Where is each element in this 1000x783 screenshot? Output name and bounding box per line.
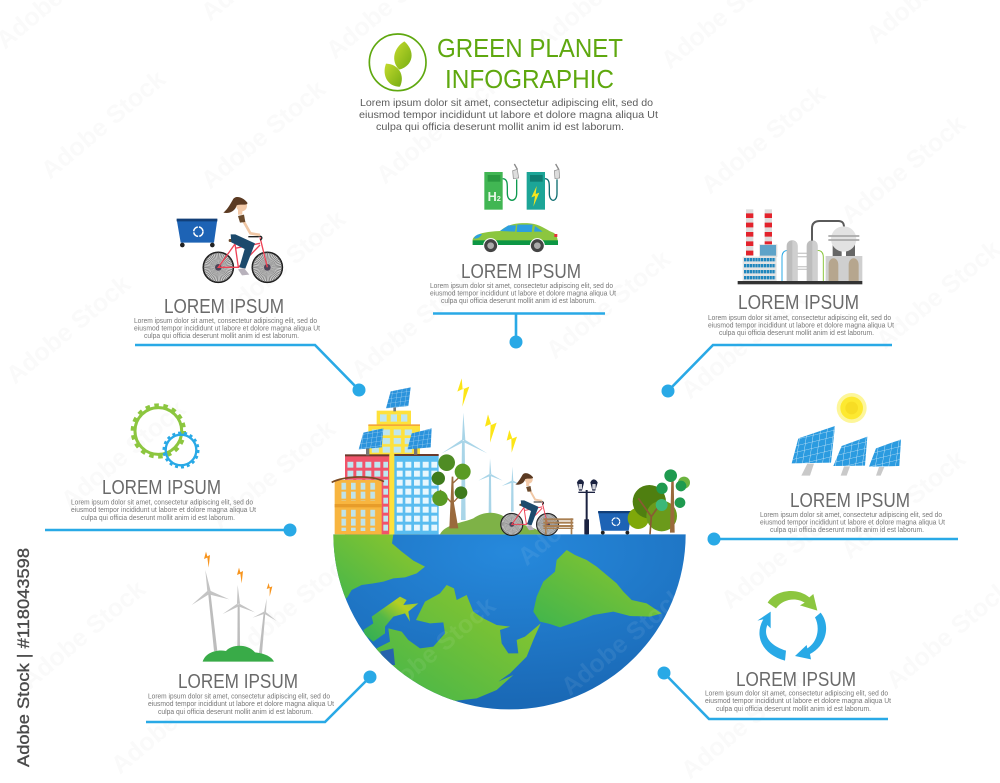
text block: Lorem ipsum dolor sit amet, consectetur adipiscing elit, sed do [705, 690, 888, 698]
text block: Lorem ipsum dolor sit amet, consectetur adipiscing elit, sed do [71, 500, 253, 506]
text block: culpa qui officia deserunt mollit anim id est laborum. [158, 709, 313, 716]
text block: culpa qui officia deserunt mollit anim id est laborum. [441, 298, 596, 305]
connector [433, 314, 605, 348]
heading: LOREM IPSUM [178, 671, 298, 693]
heading: LOREM IPSUM [461, 261, 581, 283]
text block: Lorem ipsum dolor sit amet, consectetur adipiscing elit, sed do [430, 283, 613, 290]
icon: sun and solar panels [792, 393, 901, 476]
text block: Lorem ipsum dolor sit amet, consectetur adipiscing elit, sed do [134, 318, 317, 325]
icon: gears [133, 406, 198, 467]
street lamp [577, 479, 598, 534]
watermark: Adobe Stock [836, 445, 971, 565]
watermark: Adobe Stock [206, 415, 341, 535]
panel: cycling and recycling [134, 197, 366, 396]
watermark: Adobe Stock [541, 245, 676, 365]
recycling bin [598, 511, 631, 535]
half globe: Adobe [513, 500, 590, 571]
bench [543, 518, 573, 534]
text block: culpa qui officia deserunt mollit anim id est laborum. [770, 527, 924, 534]
trees and bushes [628, 469, 690, 534]
text block: eiusmod tempor incididunt ut labore et dolore magna aliqua Ut [708, 322, 894, 330]
red building [345, 428, 394, 534]
icon: bin and cyclist [177, 197, 282, 282]
logo icon: leaves in a circle [369, 34, 426, 91]
intro text: Lorem ipsum dolor sit amet, consectetur adipiscing elit, sed do [360, 97, 653, 109]
intro text: eiusmod tempor incididunt ut labore et dolore magna aliqua Ut [359, 109, 658, 121]
intro text [359, 97, 658, 133]
hill [440, 513, 543, 534]
heading: LOREM IPSUM [164, 296, 284, 318]
watermark: Adobe [106, 708, 184, 780]
connector [708, 532, 958, 546]
title: INFOGRAPHIC [445, 64, 614, 94]
text block: eiusmod tempor incididunt ut labore et dolore magna aliqua Ut [430, 290, 616, 298]
text block: culpa qui officia deserunt mollit anim id est laborum. [719, 330, 874, 337]
panel: solar [708, 393, 958, 546]
text block [71, 500, 256, 522]
title: GREEN PLANET [437, 33, 623, 63]
wind turbines [442, 413, 522, 520]
watermark: Adobe Stock [36, 65, 171, 185]
half globe: Adobe Stock [366, 592, 501, 711]
watermark: Adobe Stock [676, 285, 811, 405]
watermark: Adobe Stock [56, 395, 191, 515]
connector [135, 345, 366, 396]
icon: recycle arrows [757, 591, 826, 661]
text block: culpa qui officia deserunt mollit anim id est laborum. [144, 333, 299, 340]
text block: eiusmod tempor incididunt ut labore et dolore magna aliqua Ut [134, 326, 320, 332]
text block: Lorem ipsum dolor sit amet, consectetur adipiscing elit, sed do [708, 315, 891, 322]
heading: LOREM IPSUM [790, 490, 910, 512]
side credit: Adobe Stock | #118043598 [14, 548, 33, 767]
heading: LOREM IPSUM [736, 669, 856, 691]
text block: Lorem ipsum dolor sit amet, consectetur adipiscing elit, sed do [760, 512, 942, 519]
text block: Lorem ipsum dolor sit amet, consectetur adipiscing elit, sed do [148, 694, 330, 700]
watermark: Adobe Stock [1, 270, 136, 390]
half globe [330, 500, 691, 711]
heading: LOREM IPSUM [102, 477, 221, 499]
header [359, 33, 658, 133]
title [437, 33, 623, 94]
cyclist [501, 473, 559, 535]
watermark: Adobe Stock [836, 110, 971, 230]
blue building [394, 428, 439, 534]
watermark: Adobe Stock [716, 495, 851, 615]
orange building [332, 477, 384, 534]
heading: LOREM IPSUM [738, 292, 859, 314]
text block: eiusmod tempor incididunt ut labore et dolore magna aliqua Ut [760, 520, 945, 526]
connector [45, 524, 296, 536]
central illustration: green city on half globe [330, 378, 691, 711]
icon: fuel pumps and car: H2 [488, 190, 501, 204]
icon: fuel pumps and car [473, 164, 560, 253]
text block [705, 690, 891, 713]
icon: industrial plant [738, 209, 862, 284]
text block [708, 315, 894, 337]
text block: culpa qui officia deserunt mollit anim id est laborum. [716, 706, 871, 713]
text block [134, 318, 320, 340]
connector [146, 670, 376, 722]
text block: eiusmod tempor incididunt ut labore et dolore magna aliqua Ut [71, 507, 256, 514]
yellow building with solar panel [368, 387, 420, 534]
watermark: Adobe Stock [226, 545, 361, 665]
lightning bolts [457, 378, 517, 453]
connector [658, 666, 888, 719]
text block [430, 283, 616, 305]
text block [760, 512, 945, 534]
text block: eiusmod tempor incididunt ut labore et dolore magna aliqua Ut [705, 698, 891, 705]
watermark: Adobe Stock [696, 80, 831, 200]
intro text: culpa qui officia deserunt mollit anim id est laborum. [376, 121, 624, 133]
watermark: Adobe Stock [16, 575, 151, 695]
icon: wind turbines [192, 552, 277, 662]
text block: eiusmod tempor incididunt ut labore et dolore magna aliqua Ut [148, 701, 334, 708]
panel: clean fuel car [430, 164, 616, 348]
tree [432, 454, 471, 528]
text block: culpa qui officia deserunt mollit anim id est laborum. [81, 515, 235, 522]
panel: gears [45, 406, 296, 536]
text block [148, 694, 334, 716]
panel: wind [146, 552, 376, 722]
watermark: Adobe Stock [196, 75, 331, 195]
half globe: Adobe Stock [556, 582, 691, 701]
watermark: Adobe Stock [371, 70, 506, 190]
panel: recycling [658, 591, 891, 719]
panel: factory [662, 209, 894, 398]
watermark: Adobe Stock [346, 265, 481, 385]
connector [662, 345, 892, 398]
watermark: Adobe Stock [216, 205, 351, 325]
watermark: Adobe Stock [676, 665, 811, 783]
